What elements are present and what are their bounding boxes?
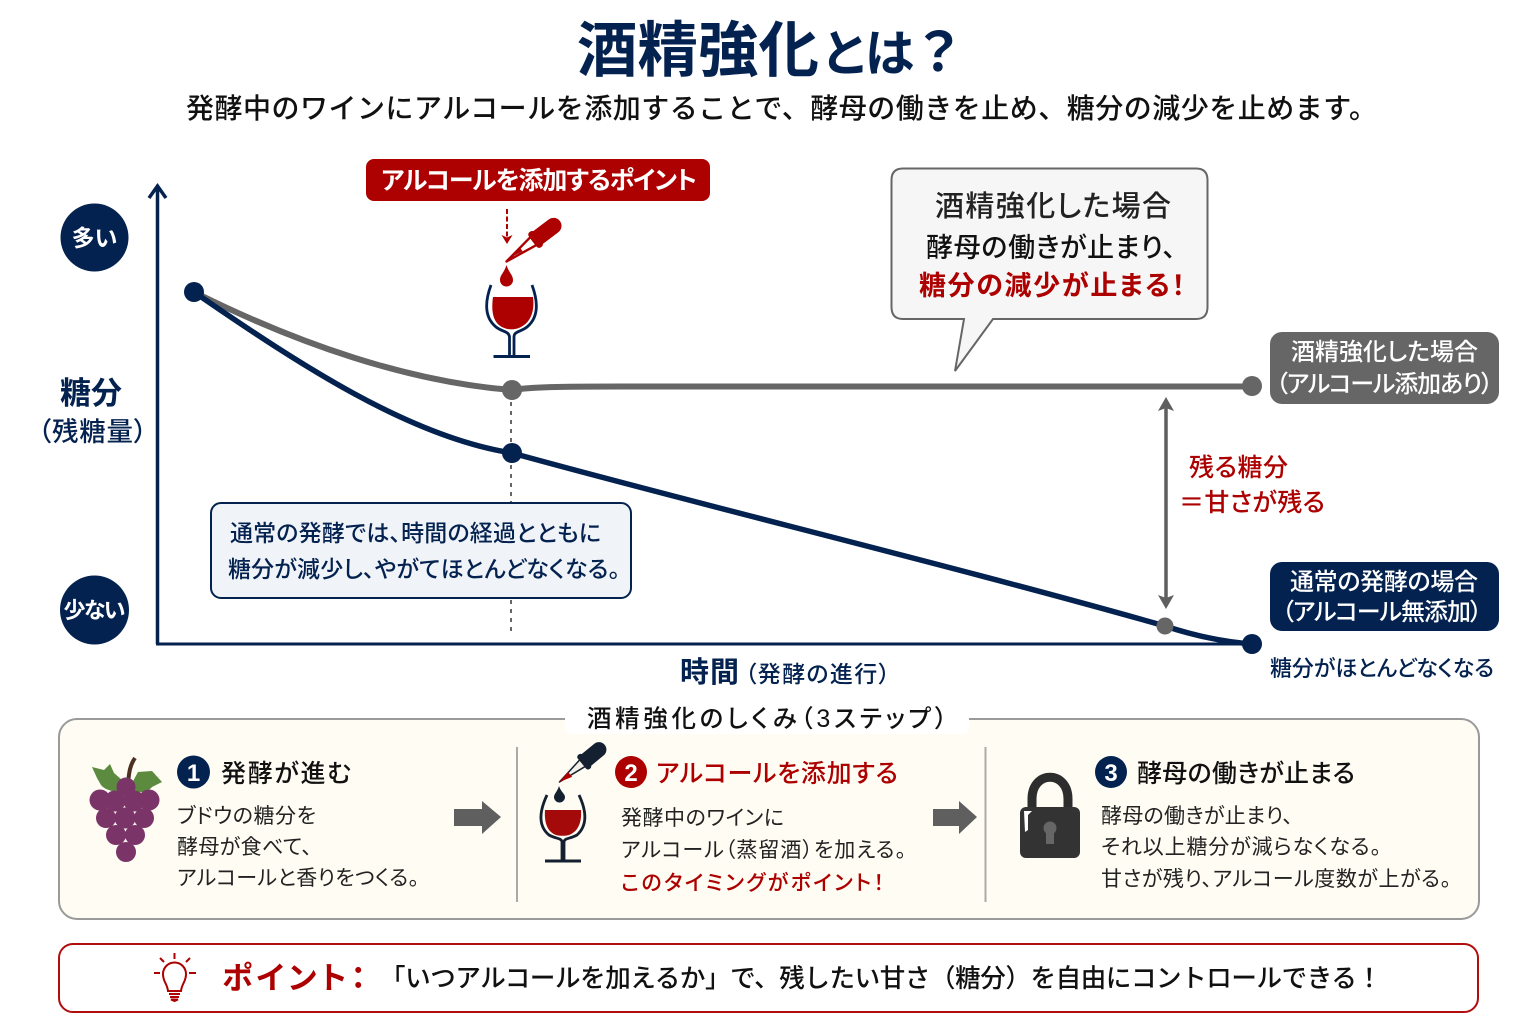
grey point at addition	[502, 380, 522, 400]
drop	[500, 265, 513, 286]
label: fortified: （アルコール添加あり）	[1276, 371, 1493, 398]
divider	[517, 747, 986, 902]
step 3: 酵母の働きが止まり、	[1101, 805, 1293, 828]
speech bubble: fortified: 酵母の働きが止まり、	[926, 233, 1176, 263]
step 3: それ以上糖分が減らなくなる。	[1101, 836, 1381, 859]
note: almost no sugar: 糖分がほとんどなくなる	[1270, 656, 1494, 681]
step 2: 発酵中のワインに	[621, 807, 784, 830]
grey end point	[1242, 376, 1262, 396]
step 1: 酵母が食べて、	[177, 836, 312, 859]
step 3: 酵母の働きが止まる	[1137, 760, 1355, 788]
label: normal	[1270, 562, 1499, 631]
label: normal: （アルコール無添加）	[1282, 599, 1482, 626]
step 1	[177, 756, 419, 890]
step 1: ブドウの糖分を	[177, 805, 316, 828]
subtitle: 発酵中のワインにアルコールを添加することで、酵母の働きを止め、糖分の減少を止めます。	[186, 93, 1377, 124]
icon: dropper and glass	[541, 738, 610, 861]
icon: wine glass	[487, 285, 536, 356]
step 3: 3	[1104, 760, 1118, 787]
badge: many: 多い	[72, 225, 117, 251]
x axis label: 時間	[680, 656, 739, 689]
navy end point	[1242, 634, 1262, 654]
point label: ポイント：	[222, 961, 366, 996]
point text: 「いつアルコールを加えるか」で、残したい甘さ（糖分）を自由にコントロールできる！	[380, 965, 1382, 993]
chart	[149, 186, 1262, 654]
step 2: アルコール（蒸留酒）を加える。	[621, 839, 906, 862]
note: normal fermentation: 通常の発酵では、時間の経過とともに	[230, 520, 601, 546]
icon: dropper	[500, 213, 566, 286]
label: normal: 通常の発酵の場合	[1290, 569, 1478, 596]
navy curve: normal fermentation	[194, 292, 1252, 644]
note: residual sugar	[1179, 454, 1325, 517]
badge: many	[60, 204, 128, 272]
callout: addition point	[366, 159, 710, 201]
dashed arrow	[502, 209, 512, 244]
step 3	[1095, 756, 1451, 891]
label: fortified	[1270, 332, 1499, 404]
title: 酒精強化とは？	[577, 16, 958, 84]
grey curve: fortified	[194, 292, 1252, 390]
callout: addition point: アルコールを添加するポイント	[381, 167, 697, 195]
step 1: 1	[187, 760, 200, 787]
panel heading: 酒精強化のしくみ（3ステップ）	[587, 705, 947, 733]
speech bubble: fortified	[892, 168, 1208, 371]
double arrow: residual sugar	[1164, 402, 1168, 604]
y axis label	[38, 376, 147, 447]
step 2	[615, 756, 906, 895]
step 2: このタイミングがポイント！	[621, 872, 884, 895]
y axis	[149, 186, 166, 644]
step 3: 甘さが残り、アルコール度数が上がる。	[1101, 868, 1451, 891]
x axis label: （発酵の進行）	[745, 661, 890, 687]
start point	[184, 282, 204, 302]
step 2: 2	[624, 760, 638, 787]
icon: padlock	[1020, 777, 1080, 858]
speech bubble: fortified: 糖分の減少が止まる！	[919, 270, 1185, 301]
x axis	[156, 642, 1250, 646]
y axis label: 糖分	[60, 376, 122, 411]
marker line	[510, 402, 512, 636]
navy point at addition	[502, 443, 522, 463]
badge: few	[60, 576, 129, 644]
note: residual sugar: 残る糖分	[1189, 454, 1288, 482]
note: residual sugar: ＝甘さが残る	[1179, 489, 1325, 517]
arrow 1	[454, 801, 501, 834]
speech bubble: fortified: 酒精強化した場合	[935, 190, 1171, 223]
badge: few: 少ない	[64, 598, 126, 623]
note: normal fermentation	[211, 503, 631, 598]
grey point near end	[1156, 618, 1174, 634]
point banner	[59, 944, 1478, 1012]
icon: light bulb	[154, 953, 196, 1001]
y axis label: （残糖量）	[38, 417, 147, 447]
step 1: 発酵が進む	[221, 760, 351, 788]
step 1: アルコールと香りをつくる。	[177, 867, 419, 890]
panel: three steps	[59, 704, 1479, 919]
x axis label	[680, 656, 890, 689]
note: normal fermentation: 糖分が減少し、やがてほとんどなくなる。	[228, 556, 620, 582]
icon: grapes	[90, 758, 162, 862]
arrow 2	[933, 801, 977, 834]
step 2: アルコールを添加する	[656, 760, 898, 788]
label: fortified: 酒精強化した場合	[1291, 339, 1478, 366]
